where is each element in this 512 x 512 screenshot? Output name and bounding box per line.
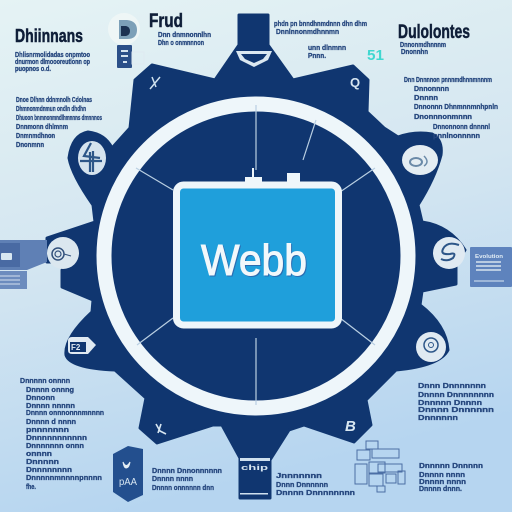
text block: left list	[16, 97, 102, 149]
text block: bottom right	[419, 463, 483, 493]
text block: bottom centre right	[276, 473, 355, 497]
top tab shield icon	[236, 51, 272, 67]
text block: right list: pnnlnonnnnn	[433, 133, 480, 140]
text block: left list: Dnnmonn dhlmnm	[16, 124, 68, 131]
text block: top right of tab: phdn pn bnndhnmdnnn dhn dhm	[274, 21, 367, 28]
gear	[47, 15, 465, 498]
text block: top centre: Dhn o onmnnnon	[158, 40, 204, 47]
text block: bottom centre left: Dnnnn onnnnnn dnn	[152, 485, 214, 492]
spokes	[136, 105, 375, 405]
text block: top right of tab	[274, 21, 367, 60]
icon: flowchart	[355, 441, 405, 492]
tooth glyph: bottom left	[156, 424, 166, 434]
text block: left list: Dnmnmdhnon	[16, 133, 55, 140]
text block: bottom left list: pnnnnnnn	[26, 427, 69, 434]
text block: bottom left list: Dnnnnnnnn	[26, 467, 72, 474]
text block: top left intro: puopnos o.d.	[15, 66, 51, 73]
text block: top right of tab: Pnnn.	[308, 53, 326, 60]
text block: lower right	[418, 383, 494, 422]
text block: top left intro: Dhlisnrmolidadas onpmtoo	[15, 52, 90, 59]
text block: bottom centre right: Jnnnnnnn	[276, 473, 322, 480]
text block: top right intro	[400, 42, 446, 56]
text block: lower right: Dnnn Dnnnnnnn	[418, 383, 486, 390]
text block: bottom right: Dnnnn nnnn	[419, 479, 466, 486]
heading: top right: Dulolontes	[398, 22, 470, 43]
icon: lower left badge: F2	[71, 343, 81, 352]
text block: bottom left list: Dnnnn d nnnn	[26, 419, 76, 426]
text block: bottom right: Dnnnn nnnn	[419, 472, 465, 479]
text block: top left intro	[15, 52, 90, 73]
text block: top right intro: Dnonnhn	[401, 49, 428, 56]
text block: bottom centre left	[152, 468, 222, 492]
icon: shield: pAA	[119, 477, 137, 488]
text block: left list: Dnoe Dlhnn ddnmnolh Cdolnas	[16, 97, 92, 104]
right side panel: Evolution	[475, 254, 503, 260]
icon: upper right badge	[402, 145, 438, 175]
central chip	[176, 168, 338, 325]
text block: bottom left list: Dnnnnnmnnnnpnnnn	[26, 475, 102, 482]
text block: bottom left list: onnnn	[26, 451, 52, 458]
text block: bottom centre right: Dnnnn Dnnnnnnnn	[276, 490, 355, 497]
heading: top centre: Frud	[149, 11, 183, 32]
icon: lower left badge	[68, 337, 96, 354]
text block: top centre	[158, 32, 211, 47]
icon: upper left badge	[78, 141, 106, 175]
tooth glyph: top left	[150, 77, 160, 89]
text block: top right intro: Dnnonmdhnnnm	[400, 42, 446, 49]
text block: right list: Dnonnnonmnnn	[414, 114, 472, 121]
text block: bottom centre left: Dnnnn Dnnonnnnnn	[152, 468, 222, 475]
text block: left list: Dhuoon bnmnonmndlhmnnns dmnnnos	[16, 115, 102, 122]
text block: bottom left list: Dnnnn nnnnn	[26, 403, 75, 410]
text block: bottom left list: Dnnonn	[26, 395, 55, 402]
text block: lower right: Dnnnnn Dnnnn	[418, 400, 482, 407]
left side panel	[0, 240, 47, 289]
text block: right list	[404, 77, 498, 140]
text block: right list: Dnnonnn Dhnmnnmnhpnln	[414, 104, 498, 111]
text block: lower right: Dnnnn Dnnnnnnnn	[418, 392, 494, 399]
text block: right list: Dnnonnnn	[414, 86, 449, 93]
chip label: Webb	[201, 236, 307, 285]
bottom tab label: chip	[241, 465, 268, 472]
text block: lower right: Dnnnn Dnnnnnn	[418, 407, 494, 414]
text block: bottom left list: Dnnnnnnnnnnn	[26, 435, 87, 442]
text block: bottom left list: Dnnnnn onnnn	[20, 378, 70, 385]
text block: top right of tab: unn dlnmnn	[308, 45, 346, 52]
icon: shield	[113, 446, 143, 502]
text block: right list: Dnnonnonn dnnnnl	[433, 124, 490, 131]
text block: right list: Dnnnn	[414, 95, 438, 102]
text block: bottom left list: Dnnnnnnn onnn	[26, 443, 84, 450]
text block: bottom left list: Dnnnn onnng	[26, 387, 74, 394]
text block: bottom left list: Dnnnn onnnonnnmnnnn	[26, 410, 104, 417]
heading: top left: Dhiinnans	[15, 26, 83, 46]
icon: document box	[117, 45, 144, 68]
outer ring	[104, 104, 408, 408]
text block: bottom right: Dnnnn dnnn.	[419, 486, 462, 493]
text block: bottom centre right: Dnnn Dnnnnnn	[276, 482, 328, 489]
icon: left spiral badge	[47, 237, 79, 269]
text block: left list: Dnonmnn	[16, 142, 44, 149]
icon: right swirl badge	[433, 237, 465, 269]
text block: bottom right: Dnnnnn Dnnnnn	[419, 463, 483, 470]
text block: top centre: Dnn dnmnonnlhn	[158, 32, 211, 39]
text block: lower right: Dnnnnnn	[418, 415, 458, 422]
text block: bottom left list: fhe.	[26, 484, 36, 491]
text block: left list: Dhmnonmdnmun ondln dhdhn	[16, 106, 86, 113]
icon: green digit: 51	[367, 47, 384, 64]
tooth glyph: top right: Q	[350, 75, 360, 90]
text block: top right of tab: Dnnlnnonmdhnnmn	[276, 29, 339, 36]
bottom tab label	[240, 458, 270, 498]
text block: top left intro: dnurmon dlmoooreutlonn op	[15, 59, 90, 66]
text block: bottom left list	[20, 378, 104, 491]
right side panel	[470, 247, 512, 287]
text block: bottom left list: Dnnnnn	[26, 459, 59, 466]
icon: lower right badge	[416, 332, 446, 362]
text block: bottom centre left: Dnnnn nnnn	[152, 476, 193, 483]
icon: D badge	[108, 13, 140, 45]
tooth glyph: bottom right: B	[345, 418, 356, 435]
